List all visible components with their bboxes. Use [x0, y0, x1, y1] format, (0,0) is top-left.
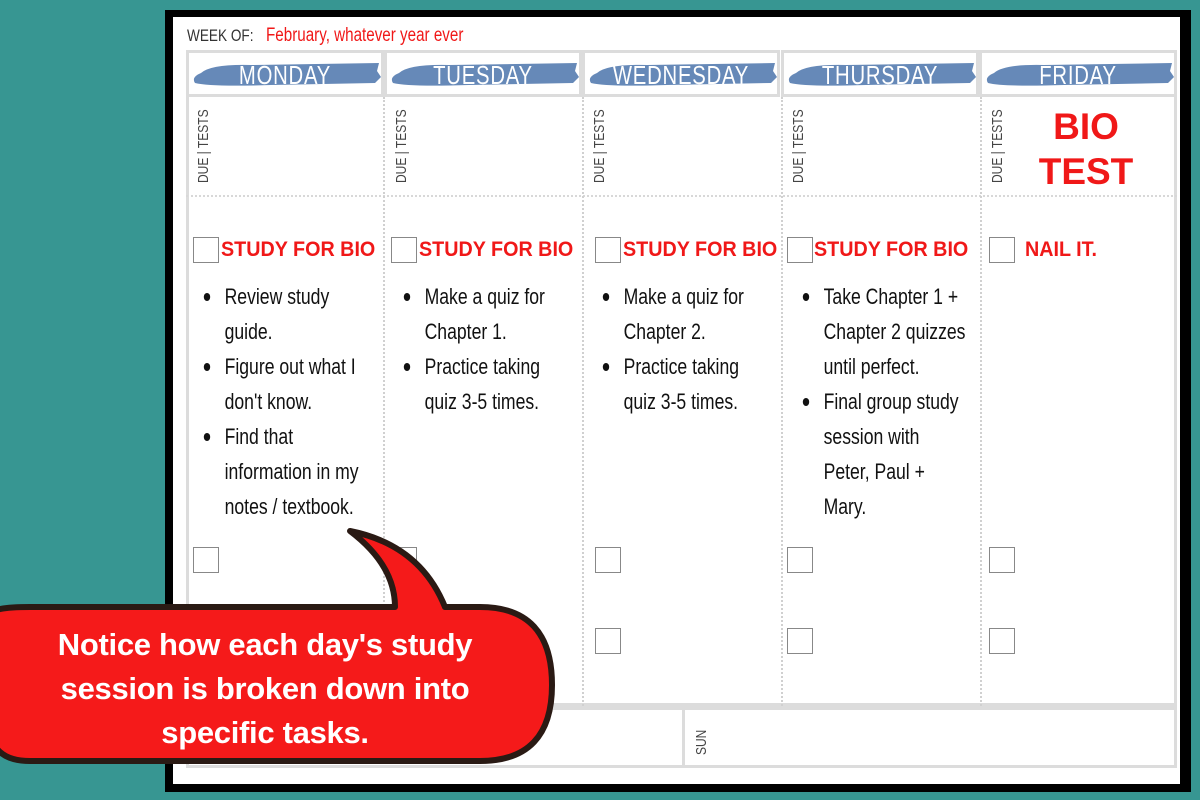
callout text: session is broken down into	[61, 671, 469, 706]
tuesday tasks: quiz 3-5 times.	[425, 389, 539, 414]
thursday tasks: Mary.	[824, 494, 866, 519]
monday tasks: notes / textbook.	[225, 494, 354, 519]
wednesday tasks: Chapter 2.	[624, 319, 706, 344]
grid outline	[186, 50, 1177, 706]
tuesday tasks	[391, 237, 573, 560]
friday bio test: BIO	[1053, 106, 1119, 147]
week of value: February, whatever year ever	[266, 25, 463, 46]
tuesday tasks: STUDY FOR BIO	[419, 238, 573, 261]
callout text: Notice how each day's study	[58, 627, 472, 662]
thursday tasks	[787, 237, 968, 654]
monday tasks: Find that	[225, 424, 293, 449]
monday tasks: guide.	[225, 319, 273, 344]
tuesday tasks: Chapter 1.	[425, 319, 507, 344]
callout text: specific tasks.	[161, 715, 369, 750]
monday tasks	[193, 237, 375, 573]
monday tasks: don't know.	[225, 389, 312, 414]
tuesday tasks: Make a quiz for	[425, 284, 545, 309]
thursday tasks: Take Chapter 1 +	[824, 284, 958, 309]
wednesday tasks: Practice taking	[624, 354, 739, 379]
monday tasks: Figure out what I	[225, 354, 356, 379]
header: monday	[186, 50, 384, 97]
due labels: DUE | TESTS	[591, 109, 608, 183]
header: friday: FRIDAY	[1039, 60, 1117, 90]
header: wednesday	[582, 50, 780, 97]
friday bio test: TEST	[1039, 151, 1133, 192]
header: thursday	[781, 50, 979, 97]
due labels: DUE | TESTS	[989, 109, 1006, 183]
header: tuesday	[384, 50, 582, 97]
callout	[0, 528, 555, 764]
friday tasks: NAIL IT.	[1025, 238, 1097, 261]
weekend row	[186, 706, 1177, 768]
due labels: DUE | TESTS	[195, 109, 212, 183]
thursday tasks: Final group study	[824, 389, 959, 414]
day headers	[189, 50, 1174, 97]
monday tasks: information in my	[225, 459, 359, 484]
friday bio test	[1039, 106, 1133, 192]
tuesday tasks: Practice taking	[425, 354, 540, 379]
monday tasks: Review study	[225, 284, 329, 309]
header: wednesday: WEDNESDAY	[613, 60, 749, 90]
wednesday tasks	[595, 237, 777, 654]
due labels	[195, 109, 1006, 183]
callout text	[58, 627, 472, 750]
header: thursday: THURSDAY	[822, 60, 938, 90]
friday tasks	[989, 237, 1097, 654]
thursday tasks: Chapter 2 quizzes	[824, 319, 965, 344]
due labels: DUE | TESTS	[790, 109, 807, 183]
due row divider	[186, 195, 1177, 197]
header: friday	[979, 50, 1177, 97]
thursday tasks: session with	[824, 424, 919, 449]
header: tuesday: TUESDAY	[433, 60, 533, 90]
column dividers	[383, 97, 982, 706]
week of label: WEEK OF:	[187, 26, 254, 45]
monday tasks: STUDY FOR BIO	[221, 238, 375, 261]
due labels: DUE | TESTS	[393, 109, 410, 183]
thursday tasks: Peter, Paul +	[824, 459, 925, 484]
header: monday: MONDAY	[239, 60, 331, 90]
wednesday tasks: STUDY FOR BIO	[623, 238, 777, 261]
wednesday tasks: quiz 3-5 times.	[624, 389, 738, 414]
wednesday tasks: Make a quiz for	[624, 284, 744, 309]
weekend row: SUN	[693, 730, 710, 755]
thursday tasks: until perfect.	[824, 354, 919, 379]
thursday tasks: STUDY FOR BIO	[814, 238, 968, 261]
